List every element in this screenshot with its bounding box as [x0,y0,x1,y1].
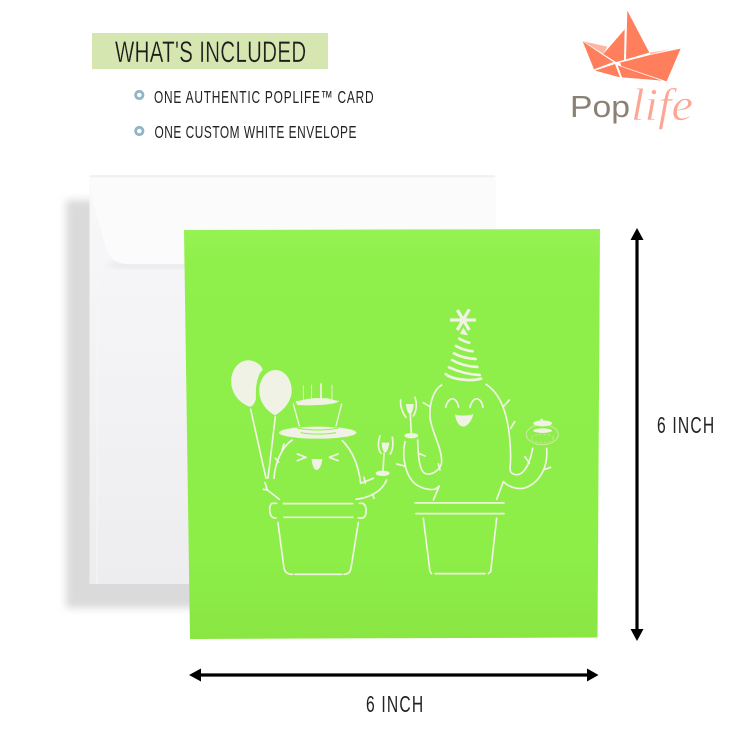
envelope shadow [66,200,426,608]
cake hat [279,384,356,439]
list: included items [136,88,374,143]
label: vertical 6 inch: 6 INCH [657,413,714,439]
donut [526,419,558,445]
left cactus face [297,454,338,470]
logo: poplife: life [631,79,693,130]
green card [184,229,600,639]
logo: poplife [570,11,693,130]
arrow: horizontal dimension [189,668,598,682]
party hat [446,309,481,380]
left cactus glass [376,436,393,476]
logo: poplife: Pop [570,89,630,124]
envelope flap shadow [108,262,495,268]
right cactus face [446,399,483,427]
left cactus with balloons and cake hat [231,360,393,574]
left cactus body [263,440,387,499]
list: included items: ONE AUTHENTIC POPLIFE™ CARD [154,88,374,108]
list: included items: ONE CUSTOM WHITE ENVELOPE [154,123,356,143]
right cactus body [397,384,551,500]
right pot [415,503,504,574]
label: horizontal 6 inch: 6 INCH [366,692,423,718]
heading: what's included: WHAT'S INCLUDED [115,36,306,69]
right cactus with party hat and donut [397,309,558,574]
balloons [231,360,292,478]
left pot [270,503,366,574]
right cactus glass [401,397,418,438]
arrow: vertical dimension [630,228,644,641]
envelope [90,176,496,584]
